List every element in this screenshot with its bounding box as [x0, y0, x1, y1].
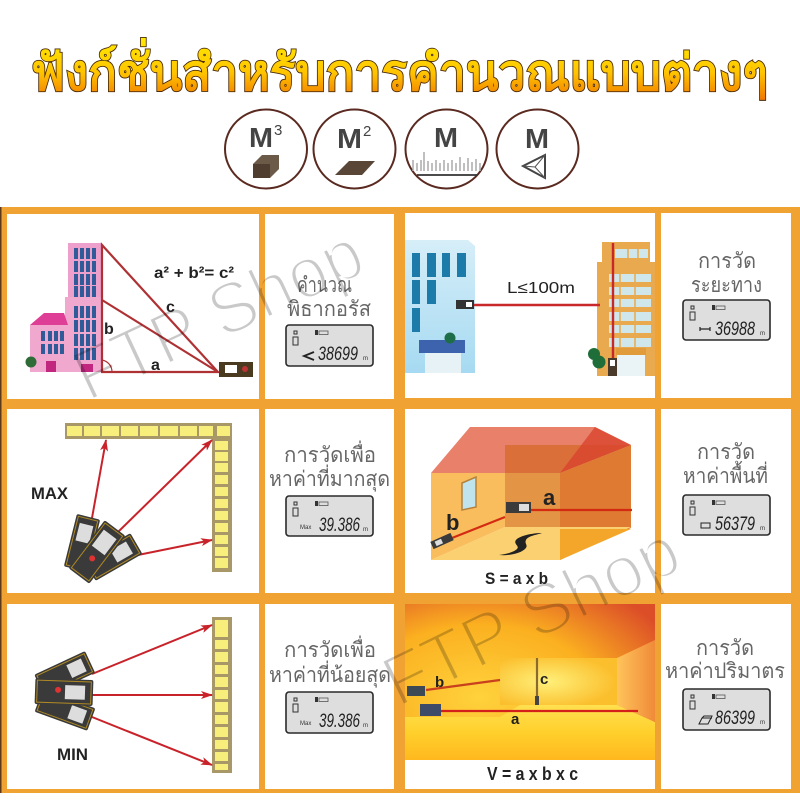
icon: angle M — [496, 110, 578, 188]
lcd display: m — [760, 331, 765, 337]
heading: หาค่าที่มากสุด — [269, 464, 390, 492]
MIN label: MIN — [57, 745, 88, 764]
lcd display: 36988 — [715, 319, 755, 340]
heading: การวัดเพื่อ — [284, 635, 376, 662]
panel: area text — [661, 409, 791, 593]
panel: min text — [265, 604, 394, 789]
measurement arrows — [92, 625, 212, 765]
lcd display: m — [363, 723, 368, 729]
watermark: FTP Shop — [61, 213, 376, 417]
heading: ระยะทาง — [691, 274, 762, 297]
side labels — [435, 671, 548, 728]
formula: S = a x b — [485, 569, 548, 588]
heading: หาค่าพื้นที่ — [683, 461, 768, 488]
heading: หาค่าปริมาตร — [665, 660, 785, 683]
panel: area illustration — [405, 409, 655, 593]
panel: distance text — [661, 213, 791, 398]
heading: การวัดเพื่อ — [284, 440, 376, 467]
formula: V = a x b x c — [487, 764, 578, 784]
panel: min illustration — [7, 604, 259, 789]
lcd display — [286, 692, 373, 733]
heading — [691, 250, 762, 297]
lcd display: 39.386 — [319, 711, 360, 732]
fanned devices — [34, 651, 95, 731]
side labels: c — [166, 299, 175, 316]
pink buildings — [26, 243, 102, 372]
house shape — [431, 427, 631, 560]
side labels: a — [511, 711, 520, 728]
lcd display — [286, 325, 373, 366]
heading — [269, 635, 391, 688]
orange building — [588, 242, 655, 376]
heading: การวัด — [696, 637, 754, 660]
heading — [665, 637, 785, 683]
panel: volume illustration — [405, 604, 655, 789]
panel: max text — [265, 409, 394, 593]
icon: area M2: M — [337, 123, 362, 154]
lcd display: Max — [300, 525, 311, 531]
range label: L≤100m — [507, 280, 575, 297]
side labels: a — [151, 357, 160, 374]
heading: พิธากอรัส — [287, 298, 371, 321]
icon: volume M3 — [225, 110, 307, 188]
icon: area M2 — [314, 110, 396, 188]
icon: area M2: 2 — [363, 123, 371, 140]
brick wall — [212, 617, 232, 773]
side labels: c — [540, 671, 548, 688]
heading: การวัด — [697, 441, 755, 464]
heading — [683, 441, 768, 488]
side labels: a — [543, 485, 556, 510]
lcd display: 56379 — [715, 514, 755, 535]
distance meter device — [219, 362, 253, 377]
panel: volume text — [661, 604, 791, 789]
lcd display: m — [363, 356, 368, 362]
icon: volume M3: 3 — [274, 122, 282, 139]
area devices — [430, 502, 531, 549]
blue building — [405, 240, 475, 373]
title: ฟังก์ชั่นสำหรับการคำนวณแบบต่างๆ — [31, 38, 768, 101]
measurement arrows — [92, 440, 212, 556]
lcd display: 38699 — [318, 344, 358, 365]
laser lines — [452, 510, 632, 538]
heading: การวัด — [698, 250, 756, 273]
icon: angle M: M — [525, 123, 549, 154]
lcd display: 86399 — [715, 708, 755, 729]
formula: a² + b²= c² — [154, 265, 234, 282]
lcd display: 39.386 — [319, 515, 360, 536]
side labels: b — [104, 321, 114, 338]
heading: หาค่าที่น้อยสุด — [269, 660, 391, 688]
distance devices — [456, 300, 617, 376]
icon: length M — [406, 110, 488, 188]
side labels — [446, 485, 556, 535]
lcd display: Max — [300, 721, 311, 727]
watermark — [61, 213, 693, 722]
brick wall — [65, 423, 232, 572]
lcd display: m — [760, 720, 765, 726]
panel: pythagoras text — [265, 214, 394, 399]
panel: distance illustration — [405, 213, 655, 398]
laser lines — [474, 243, 613, 362]
lcd display — [286, 496, 373, 536]
lcd display: m — [760, 526, 765, 532]
heading: คำนวณ — [297, 274, 352, 297]
side labels: b — [446, 510, 459, 535]
volume devices — [407, 686, 539, 716]
triangle laser lines — [102, 245, 218, 372]
orange grid frame — [0, 207, 800, 793]
icon: length M: M — [434, 122, 458, 153]
side labels — [104, 299, 175, 374]
heading — [287, 274, 371, 321]
fanned devices — [64, 514, 142, 584]
MAX label: MAX — [31, 484, 69, 503]
lcd display: m — [363, 527, 368, 533]
side labels: b — [435, 674, 444, 691]
function icons row — [225, 110, 578, 188]
lcd display — [683, 689, 770, 730]
panel: max illustration — [7, 409, 259, 593]
laser lines — [426, 658, 638, 711]
panel: pythagoras illustration — [7, 214, 259, 399]
lcd display — [683, 495, 770, 535]
room gradient — [405, 604, 655, 760]
heading — [269, 440, 390, 492]
lcd display — [683, 300, 770, 340]
watermark: FTP Shop — [370, 510, 693, 722]
icon: volume M3: M — [249, 122, 273, 153]
